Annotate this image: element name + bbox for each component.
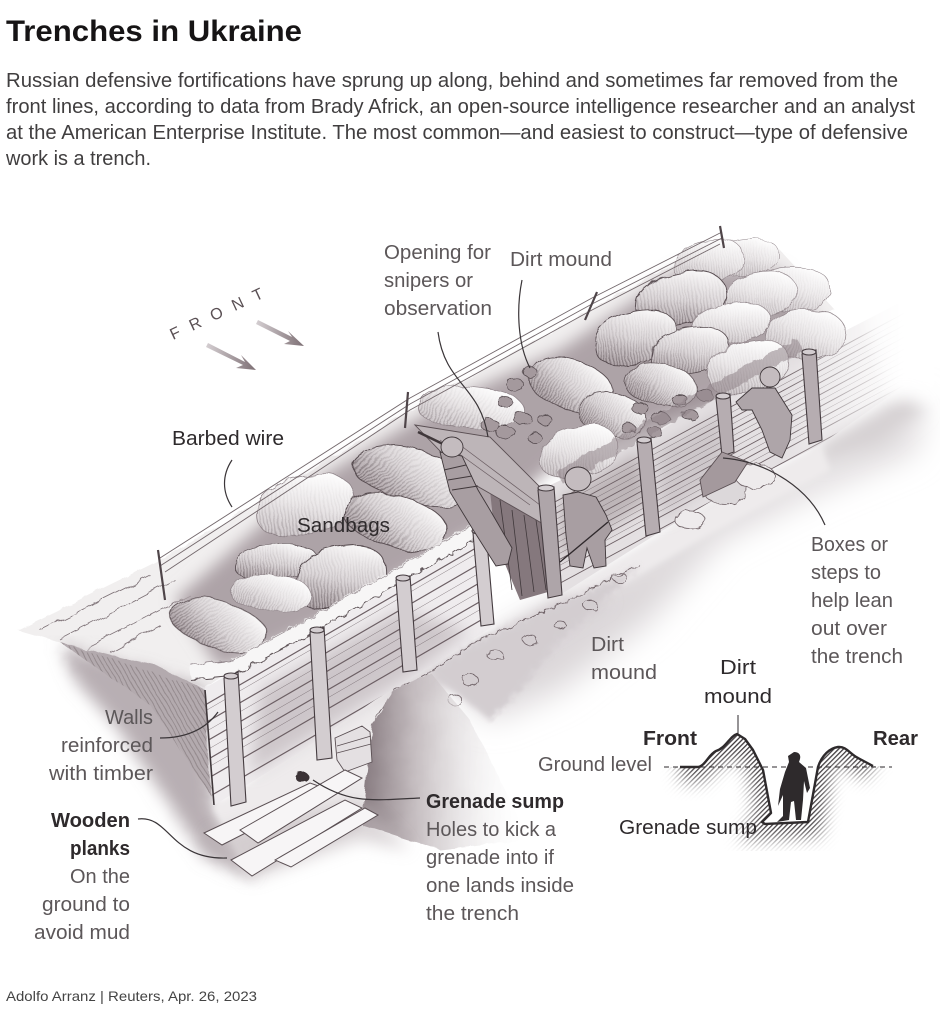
label: wooden planks: Wooden [51, 810, 130, 832]
labels: Dirt [720, 657, 757, 679]
barbed wire and posts [158, 226, 724, 600]
text block: introduction: Russian defensive fortifications have sprung up along, behind and sometimes far removed from the [6, 69, 898, 92]
rear mound shading [440, 395, 925, 720]
floor shadow [205, 800, 410, 880]
label: dirt mound rear [591, 634, 657, 684]
label: dirt mound rear: Dirt [591, 634, 624, 656]
label: opening for snipers [384, 242, 492, 437]
label: wooden planks: On the [70, 866, 130, 888]
left frame upright [205, 690, 214, 805]
text block: introduction: at the American Enterprise Institute. The most common—and easiest to construct—type of defensive [6, 121, 908, 144]
wooden planks [204, 770, 378, 876]
text block: introduction: front lines, according to data from Brady Africk, an open-source intelligence researcher and an analyst [6, 95, 915, 118]
label: grenade sump: Grenade sump [426, 791, 564, 813]
label: grenade sump: the trench [426, 903, 519, 925]
soldier leaning at the opening [418, 432, 512, 566]
label: wooden planks: planks [70, 838, 130, 860]
labels: Front [643, 728, 697, 750]
soldier standing in the trench [560, 467, 612, 568]
rear mound edge and stones [375, 464, 775, 720]
label: sandbags: Sandbags [297, 515, 390, 537]
edge fade [790, 215, 940, 400]
soldier silhouette [777, 752, 810, 822]
sandbags [158, 234, 846, 664]
label: wooden planks [34, 810, 227, 944]
labels: mound [704, 686, 772, 708]
labels: Ground level [538, 754, 652, 776]
label: boxes or steps: help lean [811, 590, 893, 612]
label: dirt mound top [510, 249, 612, 368]
ground strip behind the front wall [18, 238, 835, 688]
boxes / steps [700, 452, 748, 497]
leader to mound crest [737, 715, 739, 734]
label: wooden planks: avoid mud [34, 922, 130, 944]
label: grenade sump: Holes to kick a [426, 819, 557, 841]
label: boxes or steps: Boxes or [811, 534, 888, 556]
arrow: front right [256, 320, 304, 346]
sniper opening [415, 425, 555, 600]
labels: Grenade sump [619, 817, 757, 839]
label: barbed wire: Barbed wire [172, 428, 284, 450]
ground profile [680, 734, 873, 824]
text block: introduction: work is a trench. [5, 147, 151, 170]
wall: timber planks, near section [204, 545, 490, 806]
labels [538, 657, 918, 839]
timber posts [224, 349, 822, 806]
footer: credit: Adolfo Arranz | Reuters, Apr. 26, 2023 [6, 988, 257, 1004]
ammo box at end of trench [335, 726, 372, 772]
labels: Rear [873, 728, 918, 750]
label: grenade sump [313, 780, 574, 925]
label: walls reinforced: with timber [48, 763, 153, 785]
ground level dashed line [664, 766, 892, 768]
label: walls reinforced [48, 707, 218, 785]
label: boxes or steps [723, 458, 903, 668]
label: barbed wire [172, 428, 284, 507]
label: boxes or steps: the trench [811, 646, 903, 668]
wall: timber planks, far section [551, 320, 894, 593]
left earth face [60, 642, 255, 878]
dirt lip along the wall top [190, 345, 800, 680]
label: dirt mound top: Dirt mound [510, 249, 612, 271]
label: walls reinforced: reinforced [61, 735, 153, 757]
label: opening for snipers: Opening for [384, 242, 491, 264]
heading: front direction: FRONT [168, 284, 270, 344]
near cut face of the rear wall [362, 672, 530, 850]
label: grenade sump: grenade into if [426, 847, 554, 869]
trench floor [213, 445, 830, 878]
title: Trenches in Ukraine [6, 15, 302, 48]
label: boxes or steps: steps to [811, 562, 881, 584]
text block: introduction [5, 69, 915, 170]
heading: front direction [168, 284, 304, 370]
inset: trench cross-section [538, 657, 918, 870]
label: dirt mound rear: mound [591, 662, 657, 684]
grenade sump hole [295, 772, 309, 782]
illustration: trench cutaway [18, 215, 940, 880]
label: opening for snipers: observation [384, 298, 492, 320]
soil under the sandbags [175, 270, 830, 670]
label: walls reinforced: Walls [105, 707, 153, 729]
dirt clods on the mound [481, 367, 713, 443]
label: grenade sump: one lands inside [426, 875, 574, 897]
hatched earth [667, 735, 886, 851]
soldier on the far wall [736, 367, 792, 458]
label: opening for snipers: snipers or [384, 270, 473, 292]
label: wooden planks: ground to [42, 894, 130, 916]
label: boxes or steps: out over [811, 618, 887, 640]
arrow: front left [206, 343, 256, 370]
